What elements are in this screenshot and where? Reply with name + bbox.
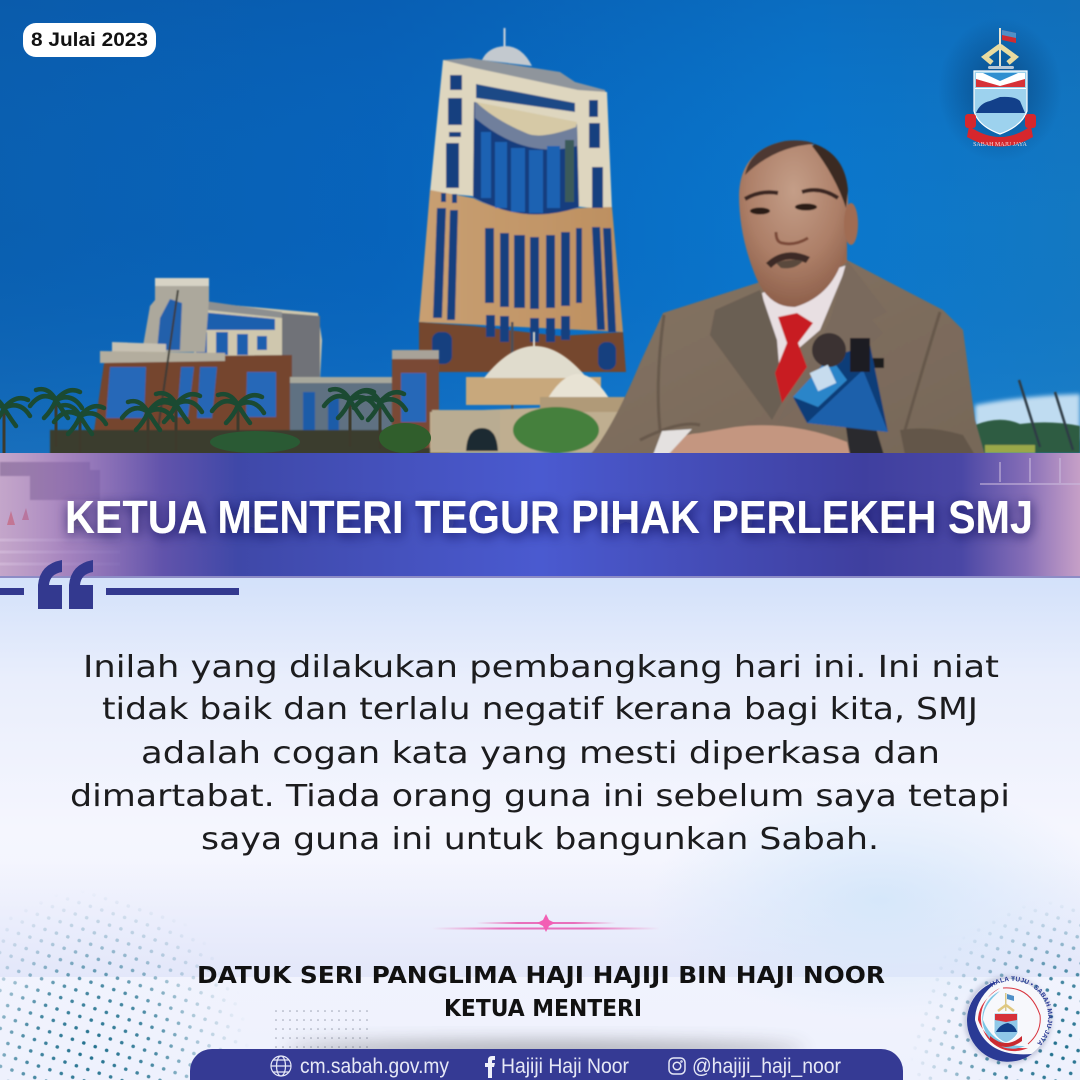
state crest: SABAH MAJU JAYA	[973, 142, 1028, 148]
wing grey upper block	[142, 279, 209, 352]
title banner	[0, 453, 1080, 578]
hair	[812, 144, 848, 208]
seal lettering: HALA TUJU • SABAH MAJU JAYA	[990, 976, 1052, 1045]
moustache and mouth	[766, 252, 810, 268]
head	[739, 141, 848, 307]
quote text	[70, 650, 1010, 857]
seal crescents	[967, 981, 1032, 1062]
crest base row	[988, 66, 1014, 69]
quote text: Inilah yang dilakukan pembangkang hari ini. Ini niat	[83, 650, 999, 685]
speaker name: DATUK SERI PANGLIMA HAJI HAJIJI BIN HAJI NOOR	[197, 963, 885, 989]
suit jacket	[590, 260, 985, 455]
nose	[776, 232, 808, 244]
tower brick base	[419, 322, 626, 372]
seal mini crest	[990, 993, 1022, 1047]
crest shield	[974, 71, 1027, 134]
wing cream body	[192, 302, 322, 380]
state crest	[938, 18, 1062, 162]
tower dome	[443, 28, 607, 100]
sleeve shadow	[900, 428, 975, 455]
suit creases	[640, 312, 940, 440]
quote text: adalah cogan kata yang mesti diperkasa dan	[141, 736, 940, 771]
photo: palm trees	[0, 389, 431, 461]
hands	[662, 425, 850, 455]
footer bar	[190, 1049, 903, 1080]
dotted decoration	[0, 896, 1080, 1080]
ear	[844, 203, 858, 245]
crest flag	[999, 28, 1016, 68]
seal red arc	[1003, 988, 1040, 1044]
connecting bridge	[290, 377, 394, 433]
icon: instagram	[669, 1058, 685, 1074]
photo: sky background	[0, 0, 1080, 455]
quote text: dimartabat. Tiada orang guna ini sebelum saya tetapi	[70, 779, 1010, 814]
microphones	[793, 333, 888, 455]
tower lamp post	[511, 322, 514, 447]
date pill	[23, 23, 156, 57]
tower window strips	[432, 75, 616, 370]
footer shadow	[285, 1042, 805, 1058]
wing brick block	[92, 355, 292, 445]
tie	[775, 313, 813, 403]
crest ribbon	[967, 126, 1033, 146]
date pill: 8 Julai 2023	[31, 30, 148, 51]
website: cm.sabah.gov.my	[300, 1055, 449, 1078]
quote text: tidak baik dan terlalu negatif kerana bagi kita, SMJ	[102, 692, 978, 727]
crest hands	[985, 46, 1015, 63]
speaker name	[197, 963, 885, 1022]
photo: government tower	[419, 28, 626, 447]
photo: left office wing	[50, 278, 450, 455]
tower upper cream section	[430, 60, 612, 210]
photo: right treeline and poles	[975, 380, 1080, 453]
icon: globe	[271, 1056, 291, 1076]
instagram handle: @hajiji_haji_noor	[692, 1055, 841, 1078]
badge	[866, 358, 884, 368]
facebook name: Hajiji Haji Noor	[501, 1055, 629, 1078]
photo: front block and domes	[392, 332, 640, 453]
speaker name: KETUA MENTERI	[444, 996, 642, 1022]
neck	[757, 240, 847, 287]
ground behind banner	[0, 453, 1080, 578]
icon: facebook	[485, 1056, 495, 1078]
seal: hala tuju	[962, 974, 1054, 1066]
eyes and brows	[745, 190, 838, 199]
shirt	[762, 265, 847, 367]
quote text: saya guna ini untuk bangunkan Sabah.	[201, 822, 879, 857]
lower background panel	[0, 578, 1080, 1080]
right lapel	[777, 260, 887, 423]
tower atrium	[473, 102, 579, 215]
wing ground strip	[50, 430, 450, 455]
tower lower tan section	[419, 190, 623, 332]
quotation mark with rules	[0, 560, 239, 609]
pink divider with star	[432, 914, 660, 932]
photo: man in suit	[590, 140, 985, 455]
left lapel	[710, 290, 782, 420]
